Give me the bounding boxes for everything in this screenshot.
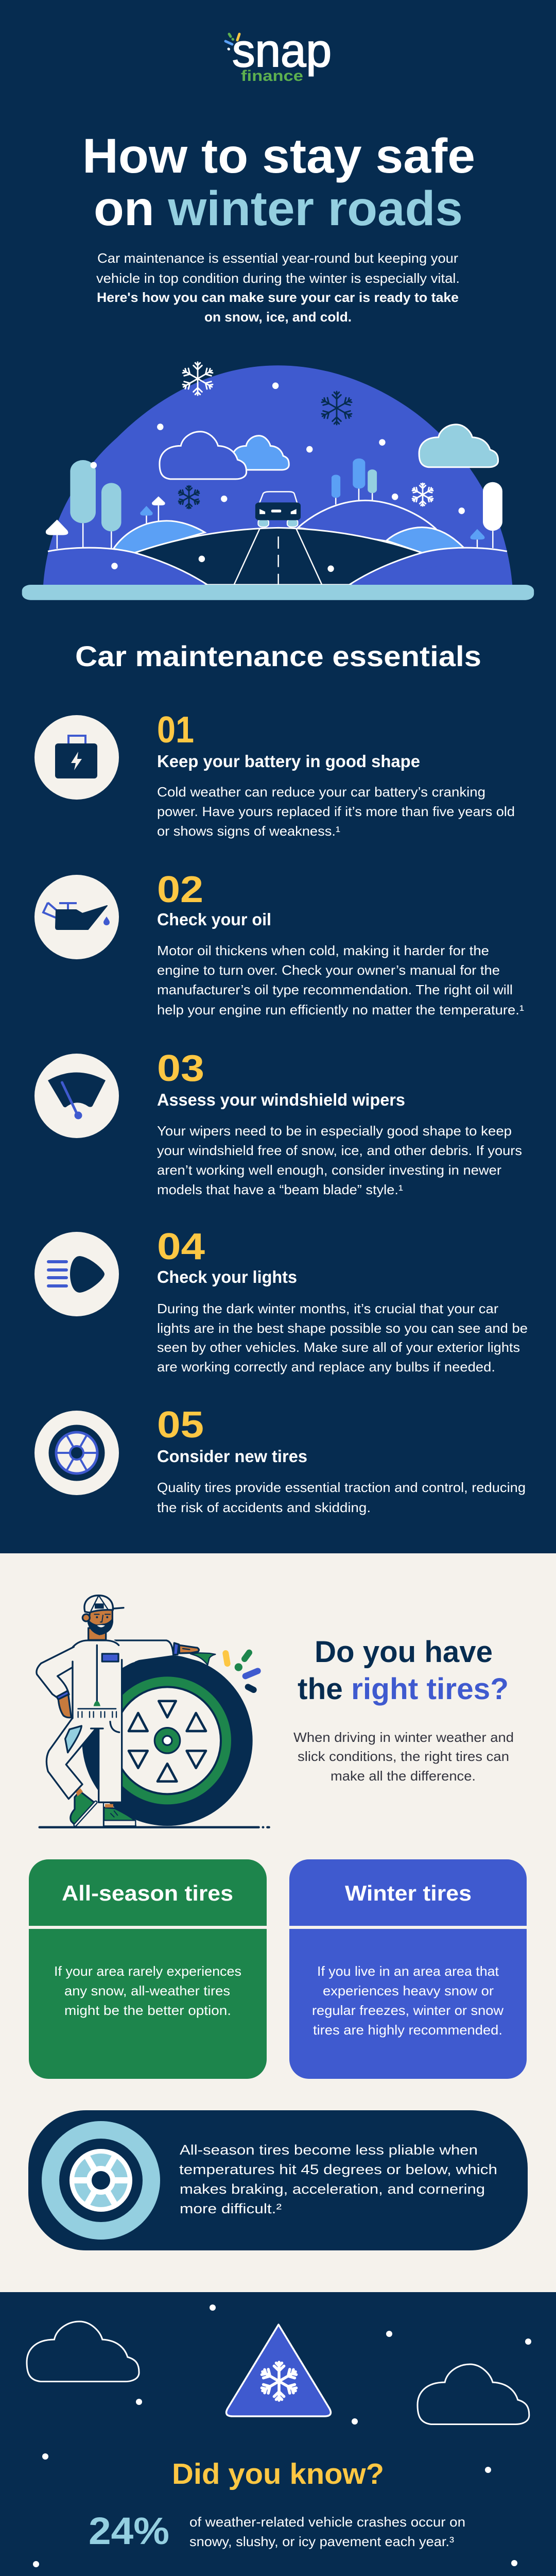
stat: 24%: snowy, slushy, or icy pavement each year.³ xyxy=(189,2534,454,2549)
back hills xyxy=(113,500,464,553)
item 05: tires xyxy=(34,1404,526,1515)
panel: winter tires xyxy=(289,1859,527,2079)
item 04: lights: are working correctly and replace any bulbs if needed. xyxy=(157,1359,495,1375)
callout: all-season tires temperature: more difficult.² xyxy=(180,2201,282,2216)
item 02: oil: engine to turn over. Check your owner’s manual for the xyxy=(157,962,500,978)
zipper, belt, pockets xyxy=(94,1645,99,1701)
panel: all-season tires: If your area rarely experiences xyxy=(54,1963,241,1979)
callout: all-season tires temperature xyxy=(28,2110,528,2250)
item 05: tires: Consider new tires xyxy=(157,1447,307,1466)
intro paragraph: vehicle in top condition during the winter is especially vital. xyxy=(96,270,460,286)
intro paragraph xyxy=(96,250,460,325)
illustration: winter road scene xyxy=(22,362,534,600)
item 05: tires: Quality tires provide essential traction and control, reducing xyxy=(157,1480,526,1495)
intro paragraph: Here's how you can make sure your car is ready to take xyxy=(97,290,459,305)
item 01: battery: 01 xyxy=(157,709,194,751)
shoes xyxy=(71,1791,95,1825)
panel: winter tires: regular freezes, winter or snow xyxy=(312,2003,503,2018)
item 04: lights: lights are in the best shape possible so you can see and be xyxy=(157,1320,528,1336)
car xyxy=(255,492,301,527)
item 04: lights xyxy=(34,1226,528,1375)
title: on winter roads xyxy=(94,181,463,236)
heading: do you have the right tires: Do you have xyxy=(315,1635,493,1669)
tires intro text: When driving in winter weather and xyxy=(293,1730,514,1745)
item 04: lights: During the dark winter months, it’s crucial that your car xyxy=(157,1301,498,1316)
item 01: battery: or shows signs of weakness.¹ xyxy=(157,823,340,839)
item 02: oil xyxy=(34,869,524,1018)
panel: winter tires: If you live in an area area that xyxy=(317,1963,499,1979)
stat: 24%: of weather-related vehicle crashes occur on xyxy=(189,2514,465,2530)
panel: all-season tires: All-season tires xyxy=(62,1881,233,1905)
sparks xyxy=(225,1653,258,1690)
illustration: mechanic leaning on tire xyxy=(37,1596,269,1827)
icon: tire xyxy=(34,1411,119,1495)
front hills xyxy=(48,548,507,585)
tires intro text xyxy=(293,1730,514,1784)
callout: all-season tires temperature: All-season tires become less pliable when xyxy=(180,2142,478,2158)
item 05: tires: the risk of accidents and skidding. xyxy=(157,1500,371,1515)
item 02: oil: 02 xyxy=(157,869,203,910)
item 03: wipers: models that have a “beam blade” style.¹ xyxy=(157,1182,403,1197)
arm xyxy=(37,1647,74,1697)
callout: all-season tires temperature: temperatures hit 45 degrees or below, which xyxy=(179,2162,497,2177)
intro paragraph: on snow, ice, and cold. xyxy=(204,309,352,325)
neck and head xyxy=(89,1628,106,1640)
item 01: battery: power. Have yours replaced if it’s more than five years old xyxy=(157,804,515,819)
panel: all-season tires: any snow, all-weather tires xyxy=(64,1983,230,1998)
title xyxy=(82,129,475,236)
base bar xyxy=(22,585,534,600)
icon: tire xyxy=(42,2121,160,2240)
item 01: battery: Cold weather can reduce your car battery’s cranking xyxy=(157,784,485,800)
panel: all-season tires xyxy=(29,1859,267,2079)
item 02: oil: Motor oil thickens when cold, making it harder for the xyxy=(157,943,489,958)
tires intro text: slick conditions, the right tires can xyxy=(298,1749,509,1764)
item 03: wipers: aren’t working well enough, consider investing in newer xyxy=(157,1162,501,1178)
road xyxy=(234,529,322,585)
central navy hill xyxy=(135,528,422,585)
icon: battery xyxy=(34,715,119,800)
icon: windshield wiper xyxy=(34,1054,119,1138)
tires intro text: make all the difference. xyxy=(331,1768,476,1784)
stat: 24% xyxy=(89,2510,465,2552)
item 03: wipers: 03 xyxy=(157,1048,204,1089)
item 01: battery xyxy=(34,709,515,839)
title: How to stay safe xyxy=(82,129,475,183)
item 02: oil: help your engine run efficiently no matter the temperature.¹ xyxy=(157,1002,524,1018)
item 03: wipers: your windshield free of snow, ice, and other debris. If yours xyxy=(157,1143,522,1158)
stat: 24%: 24% xyxy=(89,2510,169,2552)
snowflakes xyxy=(178,362,434,509)
trees xyxy=(46,459,502,549)
intro paragraph: Car maintenance is essential year-round but keeping your xyxy=(97,250,458,266)
clouds: outlined xyxy=(27,2321,529,2425)
right sleeve xyxy=(115,1640,174,1663)
icon: oil can xyxy=(34,875,119,959)
item 04: lights: 04 xyxy=(157,1226,205,1267)
mechanic xyxy=(37,1596,215,1827)
tire xyxy=(82,1655,253,1826)
heading: do you have the right tires xyxy=(298,1635,509,1706)
item 03: wipers: Assess your windshield wipers xyxy=(157,1090,405,1109)
item 02: oil: Check your oil xyxy=(157,910,271,929)
item 04: lights: Check your lights xyxy=(157,1267,297,1286)
panel: winter tires: Winter tires xyxy=(345,1881,472,1905)
heading: did you know: Did you know? xyxy=(172,2458,384,2490)
clouds xyxy=(160,425,498,479)
coverall outline xyxy=(73,1640,119,1647)
item 03: wipers: Your wipers need to be in especially good shape to keep xyxy=(157,1123,512,1139)
dome background xyxy=(43,365,512,585)
item 01: battery: Keep your battery in good shape xyxy=(157,752,420,771)
snow dots xyxy=(91,382,465,572)
callout: all-season tires temperature: makes braking, acceleration, and cornering xyxy=(180,2181,485,2197)
panel: winter tires: experiences heavy snow or xyxy=(323,1983,494,1998)
icon: snow warning triangle xyxy=(227,2325,331,2416)
icon: headlight xyxy=(34,1232,119,1316)
snow dots: did you know section xyxy=(33,2304,531,2576)
item 04: lights: seen by other vehicles. Make sure all of your exterior lights xyxy=(157,1340,520,1355)
heading: car maintenance essentials: Car maintenance essentials xyxy=(75,640,481,672)
logo: snap finance (header): snap xyxy=(232,25,332,77)
panel: winter tires: tires are highly recommended. xyxy=(313,2022,502,2038)
item 03: wipers xyxy=(34,1048,522,1197)
torso and legs fill xyxy=(46,1640,121,1802)
item 05: tires: 05 xyxy=(157,1404,204,1446)
panel: all-season tires: might be the better option. xyxy=(64,2003,231,2018)
logo: snap finance (header): finance xyxy=(241,67,303,84)
ground line xyxy=(40,1824,269,1831)
rag and hand xyxy=(190,1653,215,1665)
item 02: oil: manufacturer’s oil type recommendation. The right oil will xyxy=(157,982,513,997)
heading: do you have the right tires: the right tires? xyxy=(298,1672,509,1706)
